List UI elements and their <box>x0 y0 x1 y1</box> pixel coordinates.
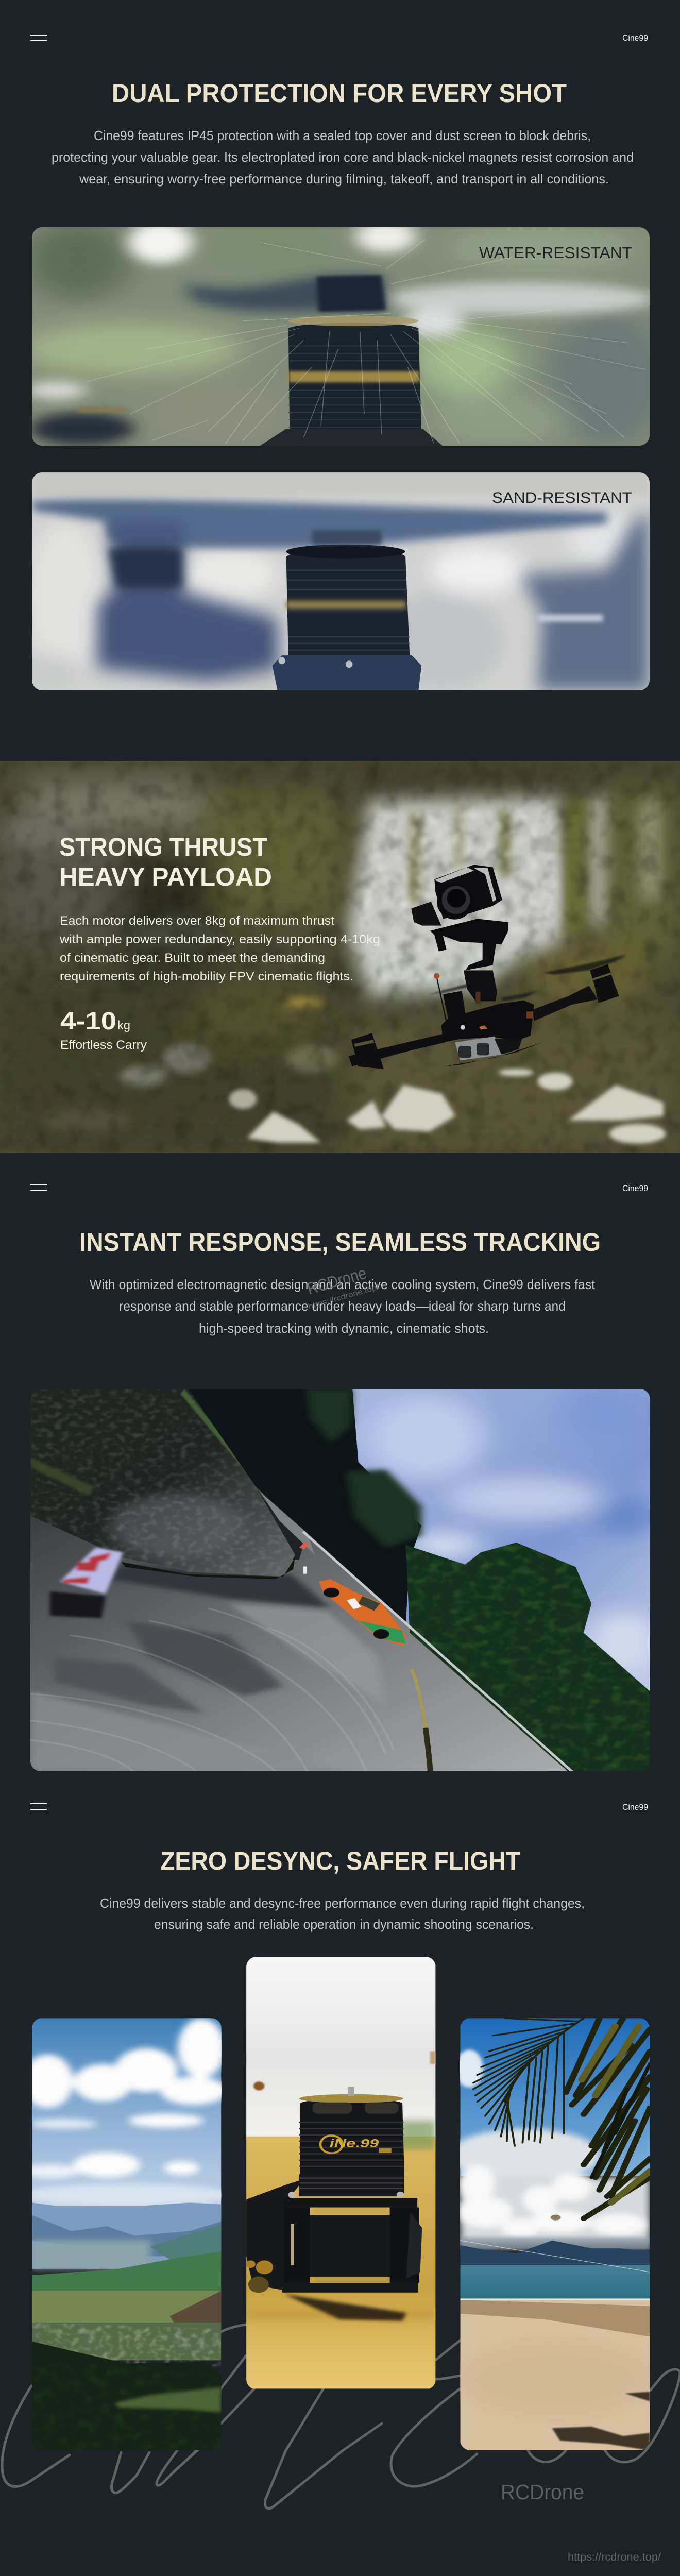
panel: sand-resistant photo <box>4 472 650 692</box>
watermark: RCDrone <box>305 1263 368 1298</box>
propeller blades <box>32 500 607 548</box>
antenna <box>437 977 447 1022</box>
title: dual protection: DUAL PROTECTION FOR EVERY SHOT <box>112 79 567 108</box>
title: instant response: INSTANT RESPONSE, SEAMLESS TRACKING <box>79 1228 601 1257</box>
stat: payload range: 4-10 <box>60 1008 116 1035</box>
panel: valley landscape photo <box>22 2018 229 2450</box>
title: zero desync: ZERO DESYNC, SAFER FLIGHT <box>160 1846 520 1875</box>
sky <box>307 1389 650 1706</box>
header: section 3 <box>30 1802 648 1812</box>
motor logo <box>320 2136 392 2153</box>
text block: thrust description <box>59 914 380 984</box>
header: section 1 <box>30 33 648 43</box>
text block: zero desync description: ensuring safe and reliable operation in dynamic shooting scenarios. <box>154 1917 534 1932</box>
motor mount <box>315 2208 390 2214</box>
cloth <box>246 2179 304 2291</box>
camera cage <box>434 865 502 919</box>
bottom cameras <box>455 1037 503 1060</box>
icon: menu <box>30 1184 47 1191</box>
sand <box>461 2300 650 2450</box>
motor <box>288 323 421 435</box>
motor <box>286 547 410 659</box>
heading: strong thrust: HEAVY PAYLOAD <box>59 862 272 891</box>
road <box>30 1511 568 1771</box>
panel: beach and palm photo <box>450 2018 658 2450</box>
palm shadows <box>552 2392 650 2450</box>
drone with camera <box>349 865 627 1066</box>
header: section 2 <box>30 1183 648 1193</box>
panel: water-resistant photo <box>18 221 664 447</box>
watermark: RCDrone: RCDrone <box>501 2480 584 2504</box>
heading: strong thrust: STRONG THRUST <box>59 833 267 861</box>
rock wall <box>30 1389 295 1577</box>
frame and arms <box>349 1034 445 1066</box>
motor logo: iNe.99 <box>330 2137 379 2150</box>
motor mount <box>273 655 421 690</box>
text block: thrust description: with ample power redundancy, easily supporting 4-10kg <box>59 933 380 946</box>
signature: Cine99 script <box>2 2325 680 2509</box>
cones <box>299 1542 309 1549</box>
panel: motor on sand photo <box>246 1957 435 2388</box>
green trees <box>406 1543 650 1771</box>
propeller <box>186 275 386 312</box>
text block: instant response description: high-speed tracking with dynamic, cinematic shots. <box>199 1320 489 1336</box>
stat: payload range: kg <box>117 1019 130 1032</box>
heading: strong thrust <box>59 833 272 891</box>
mountains <box>461 2241 650 2266</box>
text block: dual protection description <box>52 128 634 187</box>
water spray <box>87 240 646 444</box>
text block: instant response description: response and stable performance under heavy loads—ideal for sharp turns and <box>119 1298 566 1314</box>
motor bell <box>300 2098 404 2177</box>
text block: dual protection description: wear, ensuring worry-free performance during filming, takeoff, and transport in all conditions. <box>79 171 609 187</box>
text block: instant response description <box>90 1277 596 1336</box>
car <box>319 1579 406 1646</box>
panel: drift car photo <box>30 1384 659 1771</box>
text block: thrust description: of cinematic gear. Built to meet the demanding <box>60 951 325 965</box>
left motor <box>351 1033 384 1069</box>
stat: payload range <box>60 1008 147 1052</box>
dark trees <box>189 1389 421 1623</box>
text block: dual protection description: protecting your valuable gear. Its electroplated iron core and black-nickel magnets resist corrosion and <box>52 149 634 165</box>
shadow <box>284 2294 406 2321</box>
mountains <box>32 2206 221 2269</box>
label: water-resistant: WATER-RESISTANT <box>479 244 632 262</box>
text block: thrust description: requirements of high-mobility FPV cinematic flights. <box>60 970 353 984</box>
text block: dual protection description: Cine99 features IP45 protection with a sealed top cover and dust screen to block debris, <box>94 128 591 143</box>
text block: zero desync description: Cine99 delivers stable and desync-free performance even during rapid flight changes, <box>100 1895 585 1911</box>
mottled texture <box>0 761 680 1153</box>
watermark: https://rcdrone.top/ <box>307 1282 380 1311</box>
rotor blur <box>542 955 627 975</box>
parachute <box>551 2215 561 2221</box>
text block: instant response description: With optimized electromagnetic design and an active cooling system, Cine99 delivers fast <box>90 1277 596 1292</box>
cooling vents <box>299 2174 404 2196</box>
sea <box>461 2265 650 2303</box>
barrier <box>50 1548 123 1618</box>
clouds <box>450 2129 650 2244</box>
watermark <box>305 1263 380 1311</box>
flowers <box>246 2260 273 2293</box>
guard rail <box>303 1532 572 1771</box>
forest <box>32 2342 221 2450</box>
product tag: Cine99 <box>622 1183 648 1193</box>
panel: strong thrust hero photo <box>0 761 680 1153</box>
product tag: Cine99 <box>622 33 648 43</box>
text block: thrust description: Each motor delivers over 8kg of maximum thrust <box>60 914 334 928</box>
icon: menu <box>30 35 47 41</box>
watermark: url: https://rcdrone.top/ <box>568 2551 661 2563</box>
text block: zero desync description <box>100 1895 585 1932</box>
icon: menu <box>30 1803 47 1810</box>
label: sand-resistant: SAND-RESISTANT <box>492 489 632 506</box>
product tag: Cine99 <box>622 1802 648 1812</box>
stat: payload range: Effortless Carry <box>60 1038 147 1052</box>
gimbal <box>411 902 441 926</box>
palm fronds <box>473 2018 650 2218</box>
yellow road line <box>412 1669 430 1771</box>
